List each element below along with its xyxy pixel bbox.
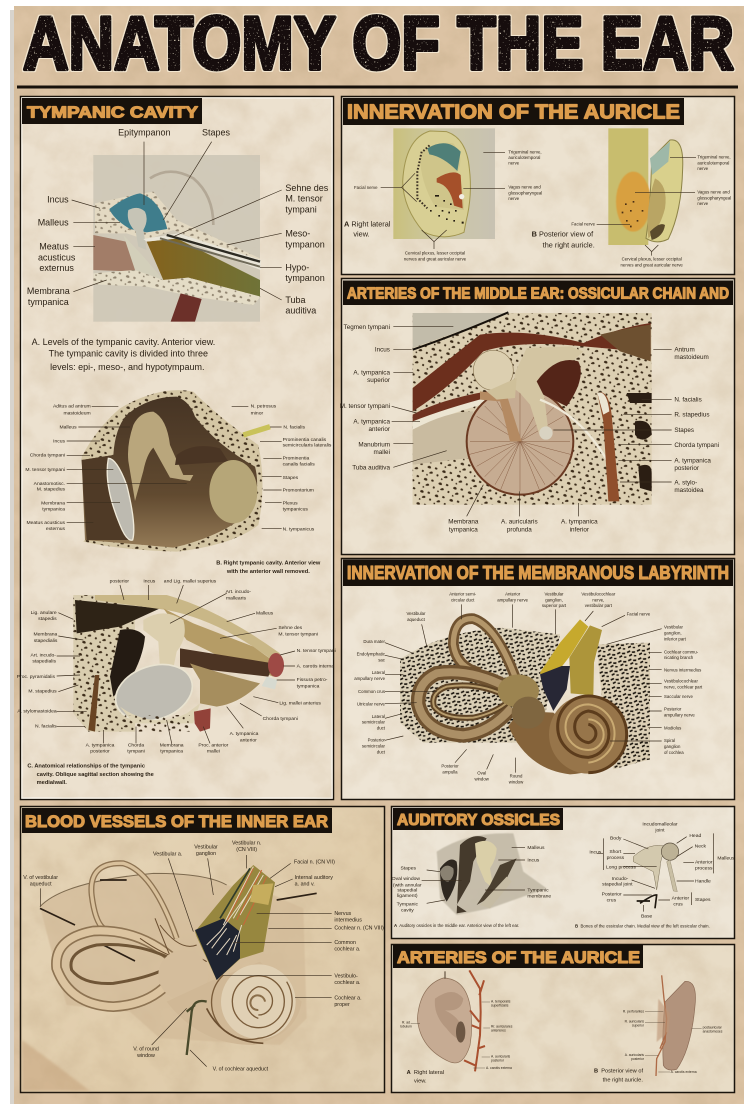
ossicle labels: (with annular — [393, 882, 422, 888]
figure C labels: N. tensor tympani — [297, 648, 336, 654]
blood vessel labels: Internal auditory — [295, 875, 333, 881]
labyrinth labels: Vestibulocochlear — [581, 591, 616, 596]
figure: arteries posterior view — [656, 975, 695, 1076]
figure C labels: mallearis — [226, 595, 246, 601]
heading: arteries of the auricle: ARTERIES OF THE AURICLE — [397, 949, 640, 967]
figure B labels: M. stapedius — [37, 487, 66, 493]
figure B labels: canalis facialis — [283, 462, 315, 468]
arteries labels: mastoideum — [674, 354, 709, 361]
labyrinth labels: Vestibular — [544, 591, 564, 596]
blood vessel labels: Vestibular a. — [153, 851, 182, 857]
figure A labels: Incus — [47, 194, 69, 204]
innervation captions: B Posterior view of — [532, 230, 594, 239]
figure B labels: Malleus — [59, 424, 77, 430]
figure B labels: Prominentia canalis — [283, 437, 327, 443]
panel: innervation of the auricle — [342, 96, 734, 274]
caption A: The tympanic cavity is divided into three — [49, 349, 208, 359]
heading: blood vessels of the inner ear: BLOOD VESSELS OF THE INNER EAR — [25, 812, 328, 831]
ossicle labels: Short — [609, 849, 622, 855]
arteries labels — [340, 324, 719, 533]
labyrinth labels: vestibular part — [585, 603, 613, 608]
ossicle labels: Posterior — [602, 892, 622, 898]
ossicle labels: cavity — [401, 908, 414, 914]
figure B: bones of the ossicular chain — [633, 843, 679, 908]
innervation labels: Vagus nerve and — [508, 185, 541, 190]
arteries of auricle labels: superficialis — [491, 1004, 509, 1008]
figure B labels: externus — [46, 526, 65, 532]
arteries of auricle labels — [400, 1000, 723, 1074]
innervation labels — [354, 149, 731, 267]
figure C: anatomical relationships — [73, 595, 284, 732]
figure A labels: acusticus — [38, 252, 76, 262]
ossicle labels: Long process — [606, 865, 636, 871]
labyrinth labels: inferior part — [664, 636, 687, 641]
panel: innervation of the membranous labyrinth — [342, 558, 734, 800]
figure C labels: Lig. anulare — [31, 610, 57, 616]
arteries labels: A. tympanica — [353, 418, 390, 425]
labyrinth labels: ampullary nerve — [497, 597, 529, 602]
innervation labels: nerves and great auricular nerve — [621, 262, 683, 267]
ossicle labels: Base — [641, 914, 653, 920]
figure B labels: semicircularis lateralis — [283, 443, 332, 449]
caption A — [32, 337, 215, 372]
labyrinth labels: window — [474, 776, 490, 781]
ossicle captions: B Bones of the ossicular chain. Medial view of the left ossicular chain. — [575, 924, 710, 929]
caption C — [27, 763, 154, 786]
panel: arteries of the middle ear — [340, 278, 734, 554]
labyrinth labels — [354, 591, 703, 784]
figure C labels: Membrana — [34, 632, 58, 638]
arteries of auricle labels: Rr. auriculares — [491, 1025, 513, 1029]
ossicle labels: Incus — [527, 858, 540, 864]
figure C labels: Chorda — [128, 743, 144, 749]
ossicle labels: Incudo- — [612, 876, 629, 882]
arteries labels: tympanica — [449, 526, 478, 533]
labyrinth labels: nerve, cochlear part — [664, 684, 703, 689]
labyrinth labels: Saccular nerve — [664, 694, 693, 699]
figure A labels: tympanon — [285, 273, 325, 283]
arteries labels: inferior — [570, 526, 589, 533]
labyrinth labels: Nervus intermedius — [664, 667, 701, 672]
figure B labels: Membrana — [41, 500, 65, 506]
figure B labels: Incus — [53, 438, 65, 444]
arteries of auricle labels: anastomoses — [703, 1029, 723, 1033]
figure C labels: A. tympanica — [230, 731, 259, 737]
panel: arteries of the auricle — [392, 944, 734, 1092]
figure C labels: Fissura petro- — [297, 677, 328, 683]
figure: membranous labyrinth — [400, 619, 650, 774]
figure B labels: minor — [251, 410, 263, 416]
figure A labels: Membrana — [27, 286, 70, 296]
arteries of auricle captions: view. — [414, 1079, 427, 1085]
blood vessel labels: V. of vestibular — [23, 875, 58, 881]
panel: tympanic cavity — [17, 96, 336, 800]
blood vessel labels: window — [137, 1053, 155, 1059]
labyrinth labels: Posterior — [664, 706, 682, 711]
caption C: C. Anatomical relationships of the tympanic — [27, 763, 145, 769]
labyrinth labels: Vestibular — [406, 611, 426, 616]
arteries of auricle labels: A. auricularis — [491, 1054, 511, 1058]
innervation labels: Vagus nerve and — [697, 190, 730, 195]
figure C labels: Proc. anterior — [198, 743, 229, 749]
arteries labels: A. auricularis — [501, 519, 538, 526]
arteries of auricle labels: A. carotis externa — [486, 1066, 512, 1070]
figure B: right tympanic cavity — [82, 390, 270, 552]
labyrinth labels: ampullary nerve — [354, 676, 386, 681]
labyrinth labels: superior part — [542, 603, 567, 608]
arteries of auricle labels: R. perforantes — [623, 1009, 644, 1013]
labyrinth labels: ganglion, — [664, 631, 682, 636]
labyrinth labels: Anterior — [505, 591, 521, 596]
figure A labels: Stapes — [202, 128, 230, 138]
labyrinth labels: window — [509, 779, 524, 784]
caption A: A. Levels of the tympanic cavity. Anterior view. — [32, 337, 215, 347]
heading: arteries of the middle ear — [343, 280, 733, 305]
labyrinth labels: semicircular — [362, 744, 386, 749]
heading: innervation of the auricle: INNERVATION OF THE AURICLE — [347, 102, 680, 124]
blood vessel labels: cochlear a. — [334, 980, 360, 986]
figure A labels: auditiva — [285, 306, 316, 316]
figure C labels: Lig. mallei anterius — [279, 701, 321, 707]
labyrinth labels: Common crus — [358, 689, 385, 694]
figure C labels: and Lig. mallei superius — [164, 579, 217, 585]
labyrinth labels: Oval — [477, 770, 486, 775]
figure C labels: A. carotis interna — [297, 663, 334, 669]
figure C labels: tympanica — [160, 749, 183, 755]
arteries labels: Antrum — [674, 346, 695, 353]
ossicle labels: crus — [673, 902, 683, 908]
ossicle labels: Stapes — [400, 866, 416, 872]
blood vessel labels: ganglion — [196, 851, 216, 857]
figure C labels — [17, 579, 336, 755]
arteries of auricle labels: superior — [632, 1024, 645, 1028]
figure C labels: Art. incudo- — [226, 589, 251, 595]
ossicle labels: Body — [610, 836, 622, 842]
labyrinth labels: Utricular nerve — [357, 701, 386, 706]
arteries labels: Chorda tympani — [674, 442, 719, 449]
labyrinth labels: Posterior — [441, 763, 459, 768]
labyrinth labels: nerve, — [592, 597, 604, 602]
labyrinth labels: semicircular — [362, 720, 386, 725]
figure B labels — [25, 404, 332, 532]
ossicle labels: Anterior — [695, 860, 713, 866]
arteries of auricle captions: B Posterior view of — [594, 1069, 643, 1075]
blood vessel labels: V. of cochlear aqueduct — [213, 1066, 269, 1072]
arteries of auricle labels: posterior — [491, 1058, 505, 1062]
labyrinth labels: ampullary nerve — [664, 712, 695, 717]
figure C labels: A. stylomastoidea — [17, 709, 57, 715]
figure C labels: mallei — [207, 749, 220, 755]
ossicle labels: Handle — [695, 878, 711, 884]
innervation labels: Cervical plexus, lesser occipital — [622, 256, 682, 261]
figure C labels: stapedis — [38, 616, 57, 622]
labyrinth labels: Cochlear commu- — [664, 649, 699, 654]
ossicle labels: process — [607, 855, 625, 861]
figure B labels: Plexus — [283, 500, 298, 506]
figure C labels: tympani — [127, 749, 145, 755]
innervation captions — [344, 220, 595, 249]
innervation labels: nerve — [508, 196, 520, 201]
labyrinth labels: ganglion — [664, 744, 681, 749]
labyrinth labels: Anterior semi- — [449, 591, 477, 596]
ossicle labels: ligament) — [397, 893, 418, 899]
arteries labels: Tegmen tympani — [344, 324, 390, 331]
figure C labels: stapedialis — [32, 659, 56, 665]
labyrinth labels: Dura mater — [363, 639, 386, 644]
arteries of auricle labels: A. temporalis — [491, 1000, 511, 1004]
innervation labels: auriculotemporal — [508, 155, 540, 160]
figure A labels: Meso- — [285, 229, 310, 239]
labyrinth labels: Round — [510, 773, 523, 778]
figure B labels: mastoideum — [64, 410, 91, 416]
figure C labels: posterior — [110, 579, 129, 585]
innervation labels: Cervical plexus, lesser occipital — [405, 250, 465, 255]
labyrinth labels: sac — [378, 657, 386, 662]
figure C labels: Malleus — [256, 610, 274, 616]
figure A: levels of tympanic cavity — [93, 155, 261, 322]
blood vessel labels: aqueduct — [30, 882, 52, 888]
figure: inner ear vessels — [40, 863, 317, 1055]
ossicle labels: Anterior — [672, 896, 689, 902]
arteries labels: A. tympanica — [353, 369, 390, 376]
figure A labels: Meatus — [39, 241, 69, 251]
blood vessel labels: V. of round — [133, 1046, 159, 1052]
arteries labels: Membrana — [448, 519, 479, 526]
arteries of auricle labels: R. ad — [402, 1020, 410, 1024]
arteries of auricle labels: A. carotis externa — [671, 1070, 697, 1074]
ossicle captions: A Auditory ossicles in the middle ear. Anterior view of the left ear. — [394, 923, 519, 928]
heading: auditory ossicles: AUDITORY OSSICLES — [397, 812, 560, 829]
blood vessel labels: Vestibular — [194, 844, 218, 850]
caption B: B. Right tympanic cavity. Anterior view — [216, 560, 321, 566]
figure B labels: N. tympanicus — [283, 526, 315, 532]
arteries labels: A. tympanica — [674, 457, 711, 464]
blood vessel labels: Cochlear a. — [334, 995, 362, 1001]
blood vessel labels: (CN VIII) — [236, 847, 257, 853]
figure A labels: Hypo- — [285, 262, 309, 272]
labyrinth labels: aqueduct — [407, 617, 426, 622]
labyrinth labels: ganglion, — [545, 597, 563, 602]
caption C: cavity. Oblique sagittal section showing the — [37, 772, 154, 778]
arteries labels: Manubrium — [358, 441, 390, 448]
figure A labels — [27, 128, 329, 316]
labyrinth labels: Modiolus — [664, 725, 681, 730]
caption B — [216, 560, 321, 575]
figure C labels: tympanica — [297, 683, 320, 689]
figure C labels: stapedialis — [34, 638, 58, 644]
figure C labels: A. tympanica — [86, 743, 115, 749]
figure C labels: M. stapedius — [28, 689, 57, 695]
figure B labels: tympanicus — [283, 506, 308, 512]
arteries of auricle labels: posterior — [631, 1057, 645, 1061]
arteries labels: posterior — [674, 465, 699, 472]
labyrinth labels: Spiral — [664, 738, 675, 743]
blood vessel labels: Nervus — [334, 911, 352, 917]
labyrinth labels: circular duct — [451, 597, 475, 602]
arteries of auricle labels: R. auricularis — [625, 1020, 644, 1024]
arteries labels: R. stapedius — [674, 412, 710, 419]
panel: blood vessels of the inner ear — [20, 806, 384, 1092]
figure A labels: Tuba — [285, 295, 305, 305]
labyrinth labels: Vestibulocochlear — [664, 679, 698, 684]
ossicle labels: Stapes — [695, 897, 711, 903]
blood vessel labels: Vestibulo- — [334, 973, 358, 979]
labyrinth labels: Lateral — [372, 670, 385, 675]
blood vessel labels: Vestibular n. — [232, 840, 261, 846]
ossicle labels: Incus — [589, 850, 602, 856]
labyrinth labels: ampulla — [442, 769, 458, 774]
innervation labels: glossopharyngeal — [697, 195, 731, 200]
labyrinth labels: duct — [377, 726, 386, 731]
ossicle labels: Malleus — [717, 856, 735, 862]
innervation labels: Trigeminal nerve, — [697, 155, 731, 160]
figure A labels: Epitympanon — [118, 128, 171, 138]
blood vessel labels: intermedius — [334, 918, 362, 924]
ossicle labels: Tympanic — [527, 887, 549, 893]
blood vessel labels — [23, 840, 384, 1072]
figure B labels: M. tensor tympani — [25, 467, 65, 473]
panel: auditory ossicles — [392, 806, 735, 938]
innervation captions: the right auricle. — [543, 240, 595, 249]
figure C labels: Art. incudo- — [30, 652, 56, 658]
figure C labels: Incus — [143, 579, 156, 585]
blood vessel labels: proper — [334, 1002, 350, 1008]
labyrinth labels: Vestibular — [664, 625, 684, 630]
innervation labels: nerve — [508, 161, 520, 166]
arteries of auricle captions: the right auricle. — [603, 1077, 643, 1083]
innervation captions: view. — [353, 230, 370, 239]
labyrinth labels: Facial nerve — [627, 611, 651, 616]
figure: ossicular chain and tympanic membrane — [413, 312, 652, 505]
ossicle labels: Head — [689, 833, 701, 839]
figure C labels: Proc. pyramidalis — [17, 674, 55, 680]
arteries labels: anterior — [369, 426, 390, 433]
caption B: with the anterior wall removed. — [226, 569, 310, 575]
caption A: levels: epi-, meso-, and hypotympaum. — [50, 362, 204, 372]
innervation captions: A Right lateral — [344, 220, 391, 229]
figure A labels: tympanon — [285, 239, 325, 249]
figure C labels: Sehne des — [278, 625, 303, 631]
ossicle labels: Incudomalleolar — [642, 822, 678, 828]
ossicle labels: crus — [607, 897, 617, 903]
ossicle labels: stapedial joint — [602, 882, 633, 888]
figure B labels: Prominentia — [283, 456, 309, 462]
ossicle labels — [392, 822, 735, 920]
arteries of auricle labels: lobulum — [400, 1024, 412, 1028]
ossicle labels: membrane — [527, 893, 551, 899]
labyrinth labels: Endolymphatic — [357, 651, 386, 656]
ossicle labels: Malleus — [527, 845, 545, 851]
arteries of auricle labels: A. auricularis — [625, 1053, 644, 1057]
ossicle labels: Tympanic — [397, 902, 418, 908]
divider rule — [17, 86, 738, 88]
ossicle captions — [394, 923, 710, 929]
figure A labels: Malleus — [38, 218, 69, 228]
labyrinth labels: of cochlea — [664, 750, 684, 755]
arteries labels: superior — [367, 377, 390, 384]
figure A labels: externus — [39, 263, 74, 273]
innervation labels: nerve — [697, 201, 709, 206]
innervation labels: auriculotemporal — [697, 160, 729, 165]
figure: posterior view ear — [608, 128, 683, 245]
labyrinth labels: nicating branch — [664, 655, 694, 660]
arteries labels: profunda — [507, 526, 532, 533]
ossicle labels: Oval window — [392, 876, 420, 882]
blood vessel labels: Cochlear n. (CN VIII) — [334, 926, 384, 932]
arteries labels: Tuba auditiva — [352, 464, 390, 471]
figure B labels: Promontorium — [283, 488, 314, 494]
blood vessel labels: a. and v. — [295, 882, 315, 888]
figure B labels: Meatus acusticus — [26, 520, 65, 526]
figure C labels: M. tensor tympani — [278, 631, 318, 637]
figure A labels: tympanica — [28, 297, 69, 307]
figure A: ossicles in the middle ear — [437, 833, 547, 915]
figure C labels: Chorda tympani — [263, 716, 298, 722]
figure B labels: N. facialis — [283, 424, 305, 430]
figure B labels: Stapes — [283, 475, 299, 481]
arteries labels: mallei — [373, 449, 390, 456]
ossicle labels: joint — [654, 828, 665, 834]
heading: tympanic cavity: TYMPANIC CAVITY — [27, 104, 198, 122]
arteries labels: A. tympanica — [561, 519, 598, 526]
ossicle labels: process — [695, 866, 713, 872]
figure C labels: posterior — [90, 749, 110, 755]
figure: right lateral view ear — [393, 128, 495, 239]
labyrinth labels: Lateral — [372, 714, 385, 719]
figure A labels: tympani — [285, 204, 317, 214]
arteries labels: Incus — [375, 346, 390, 353]
arteries labels: N. facialis — [674, 397, 702, 404]
figure C labels: N. facialis — [35, 724, 57, 730]
labyrinth labels: duct — [377, 750, 386, 755]
innervation labels: Facial nerve — [571, 222, 596, 227]
heading: tympanic cavity — [22, 98, 202, 124]
ossicle labels: stapedial — [397, 888, 417, 894]
labyrinth labels: Posterior — [368, 738, 386, 743]
figure B labels: Chorda tympani — [30, 453, 65, 459]
arteries of auricle labels: anteriores — [491, 1029, 506, 1033]
figure B labels: tympanica — [42, 506, 65, 512]
innervation labels: nerves and great auricular nerve — [404, 257, 467, 262]
innervation labels: Facial nerve — [354, 185, 378, 190]
figure C labels: anterior — [240, 737, 257, 743]
innervation labels: nerve — [697, 166, 709, 171]
figure B labels: Aditus ad antrum — [53, 404, 91, 410]
blood vessel labels: Facial n. (CN VII) — [294, 860, 335, 866]
innervation labels: Trigeminal nerve, — [508, 149, 542, 154]
ossicle labels: Neck — [695, 844, 707, 850]
blood vessel labels: cochlear a. — [334, 947, 360, 953]
figure B labels: Anastomotisc. — [34, 481, 65, 487]
caption C: medialwall. — [37, 780, 67, 786]
arteries labels: M. tensor tympani — [340, 403, 390, 410]
arteries labels: mastoidea — [674, 487, 704, 494]
figure: arteries right lateral view — [417, 970, 485, 1071]
figure B labels: N. petrosus — [251, 404, 277, 410]
blood vessel labels: Common — [334, 940, 356, 946]
figure A labels: Sehne des — [285, 183, 329, 193]
figure C labels: Membrana — [160, 743, 184, 749]
innervation labels: glossopharyngeal — [508, 190, 542, 195]
arteries of auricle labels: postauricular — [703, 1025, 723, 1029]
arteries labels: A. stylo- — [674, 479, 697, 486]
arteries of auricle captions — [407, 1069, 643, 1085]
arteries labels: Stapes — [674, 427, 694, 434]
figure A labels: M. tensor — [285, 194, 323, 204]
arteries of auricle captions: A Right lateral — [407, 1070, 444, 1076]
